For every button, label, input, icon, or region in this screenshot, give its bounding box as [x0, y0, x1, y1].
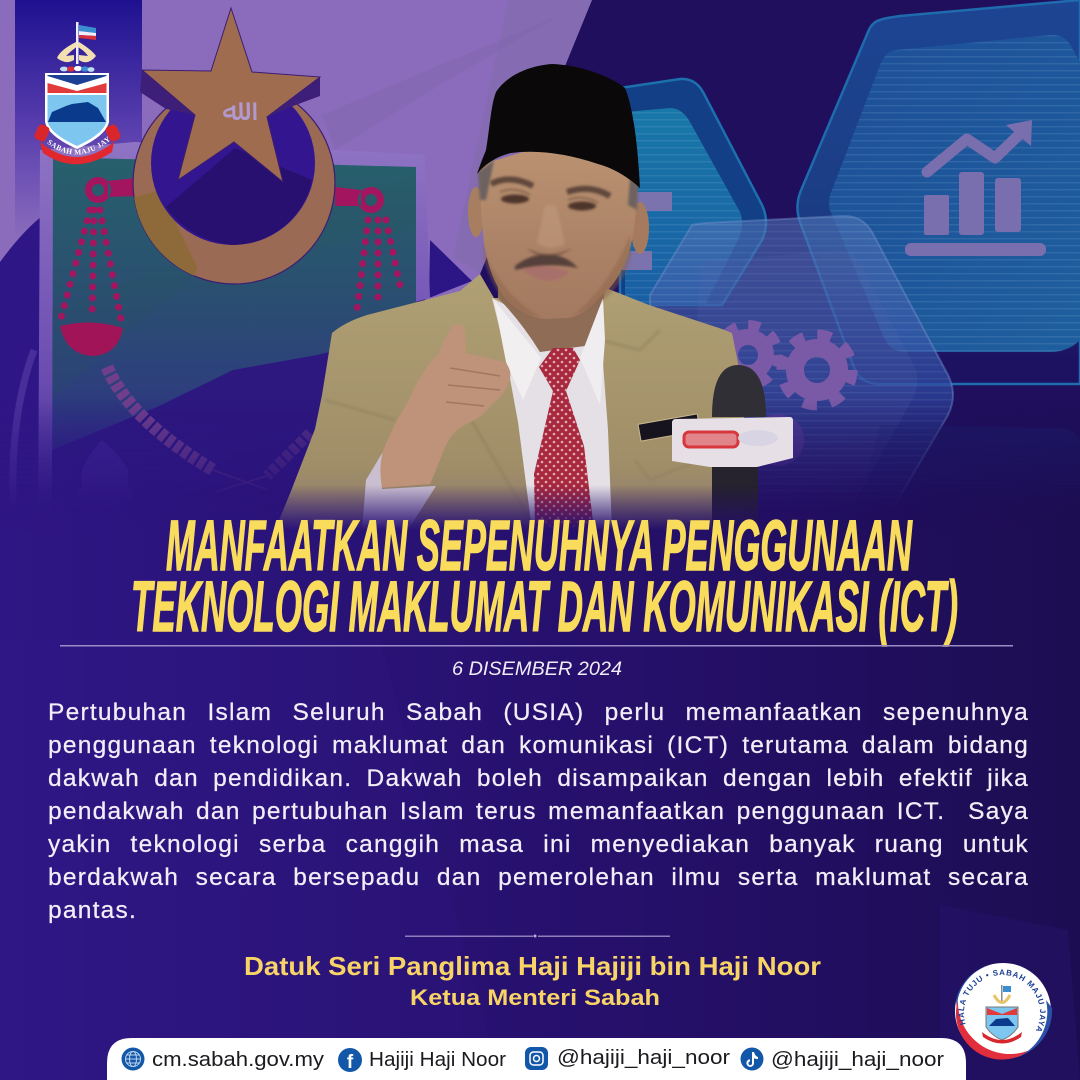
icon: faded gear [752, 414, 804, 466]
calligraphy mark: ﷲ [222, 94, 257, 127]
tie [534, 348, 594, 530]
speaker name: Datuk Seri Panglima Haji Hajiji bin Haji Noor [244, 951, 821, 981]
arms [57, 42, 96, 62]
finger creases [446, 368, 500, 406]
violet left background panel [0, 0, 592, 300]
date: 6 DISEMBER 2024 [452, 659, 622, 680]
body text paragraph: yakin teknologi serba canggih masa ini menyediakan banyak ruang untuk [48, 831, 1029, 858]
mosque silhouette [78, 440, 132, 530]
right dark navy panel [470, 0, 1080, 540]
right collar [580, 298, 605, 405]
dark purple wedge beside head [429, 240, 472, 298]
lower left facets [0, 640, 500, 1080]
body text paragraph: penggunaan teknologi maklumat dan komunikasi (ICT) terutama dalam bidang [48, 732, 1029, 759]
body text paragraph [48, 699, 1029, 924]
darker violet band behind head [453, 0, 592, 274]
panel: chart hexagon [797, 0, 1080, 384]
icon: facebook: f [347, 1052, 354, 1073]
round badge emblem [955, 963, 1052, 1060]
crest shield [45, 73, 109, 149]
beads [60, 66, 94, 72]
portrait of Chief Minister [275, 64, 793, 530]
dark purple sweep at left [0, 216, 60, 540]
panel: document hexagon [615, 79, 766, 305]
badge crest [982, 985, 1022, 1044]
crescent inner disc [151, 81, 315, 245]
face [480, 145, 636, 319]
body text paragraph: pendakwah dan pertubuhan Islam terus memanfaatkan penggunaan ICT. Saya [48, 798, 1029, 825]
neck [498, 285, 604, 352]
shirt [492, 298, 612, 530]
social media pill [107, 1038, 966, 1080]
speaker role: Ketua Menteri Sabah [410, 985, 660, 1010]
grey hair [478, 160, 638, 210]
mic windscreen [712, 365, 766, 417]
right ear [631, 202, 649, 254]
icon: facebook [338, 1048, 362, 1073]
diagonal facets [52, 175, 416, 400]
icon: large gear [782, 335, 852, 405]
mic stem [712, 460, 758, 530]
crest ribbon [34, 124, 120, 164]
left ear [468, 187, 484, 237]
mic logo [684, 432, 738, 447]
top-left state crest [34, 22, 120, 164]
face details [481, 179, 632, 318]
name tag [638, 414, 700, 441]
faint arc at left [13, 350, 34, 520]
panel: shield emblem [38, 8, 430, 540]
blue and red swoosh [956, 1000, 1030, 1060]
jacket shading [325, 330, 700, 520]
body text paragraph: Pertubuhan Islam Seluruh Sabah (USIA) perlu memanfaatkan sepenuhnya [48, 699, 1029, 726]
panel: gears glass hexagon [650, 216, 953, 530]
wheat branch [107, 367, 310, 492]
songkok hat [477, 64, 640, 188]
hand and forearm [380, 324, 510, 488]
flag [79, 25, 96, 40]
instagram text: @hajiji_haji_noor [557, 1047, 730, 1069]
flag pole [76, 22, 78, 64]
tiktok text: @hajiji_haji_noor [771, 1049, 944, 1071]
rule under title [60, 645, 1013, 646]
star [142, 8, 320, 182]
body text paragraph: berdakwah secara bersepadu dan pemerolehan ilmu serta maklumat secara [48, 864, 1029, 891]
microphone [672, 365, 793, 530]
icon: rising chart [905, 120, 1046, 256]
shield green field [52, 157, 416, 530]
lower fade panel [279, 487, 758, 530]
lower right lighter facet [940, 905, 1080, 1080]
quote divider [405, 934, 670, 938]
right scale [335, 187, 402, 310]
body text paragraph: pantas. [48, 897, 137, 924]
star right shadow [267, 77, 320, 117]
facebook text: Hajiji Haji Noor [369, 1049, 506, 1071]
title [131, 507, 958, 647]
mountain silhouette [52, 330, 416, 540]
panel: lower right faded hexagon [850, 425, 1080, 540]
left collar [494, 300, 541, 400]
icon: document lines [615, 192, 672, 270]
star left shadow [140, 70, 195, 115]
background fade panel [10, 412, 1080, 522]
body text paragraph: dakwah dan pendidikan. Dakwah boleh disampaikan dengan lebih efektif jika [48, 765, 1029, 792]
lighter diagonal band [322, 15, 560, 150]
left scale [60, 177, 136, 356]
mic flag [672, 417, 793, 467]
icon: small gear [718, 325, 778, 385]
website text: cm.sabah.gov.my [152, 1049, 324, 1071]
shirt cuff [362, 450, 436, 530]
crescent [132, 104, 336, 285]
icon: tiktok [740, 1048, 764, 1070]
icon: instagram [525, 1047, 548, 1070]
jacket [275, 274, 753, 530]
blue vertical strip [15, 0, 142, 238]
shield frame [38, 142, 430, 540]
badge ring text: HALA TUJU • SABAH MAJU JAYA [958, 970, 1046, 1031]
icon: globe [122, 1048, 144, 1070]
